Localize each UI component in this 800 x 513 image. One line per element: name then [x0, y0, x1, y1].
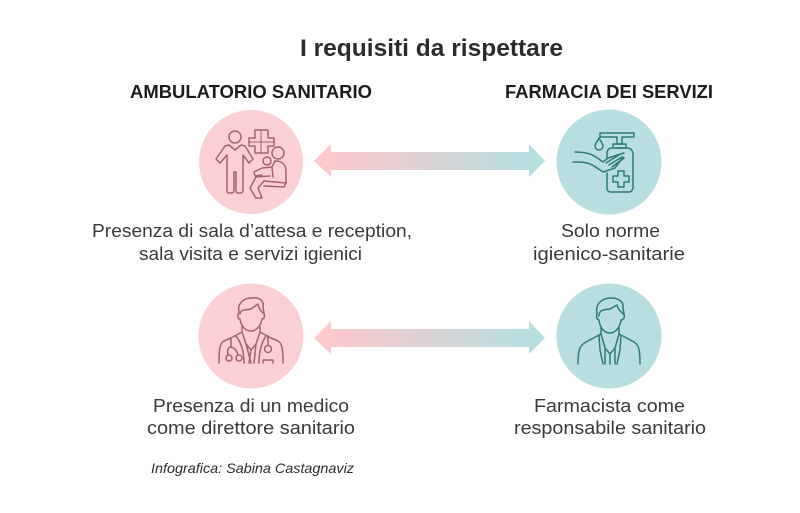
text: hygiene rules: Solo norme — [561, 220, 660, 241]
icon: doctor — [198, 284, 304, 388]
text: hygiene rules: igienico-sanitarie — [533, 243, 685, 264]
text: medical director — [147, 395, 355, 438]
heading: ambulatorio sanitario: AMBULATORIO SANITARIO — [130, 82, 372, 102]
arrow: top double arrow — [314, 144, 545, 177]
text: pharmacist: Farmacista come — [534, 395, 685, 416]
credit: Infografica: Sabina Castagnaviz — [151, 460, 354, 476]
arrow: bottom double arrow — [314, 321, 545, 354]
text: medical director: Presenza di un medico — [153, 395, 349, 416]
text: ambulatory rooms — [92, 220, 412, 264]
icon: waiting room — [199, 110, 303, 214]
text: ambulatory rooms: Presenza di sala d’attesa e reception, — [92, 220, 412, 241]
title: I requisiti da rispettare — [300, 35, 563, 62]
text: hygiene rules — [533, 220, 685, 264]
text: medical director: come direttore sanitario — [147, 417, 355, 438]
text: ambulatory rooms: sala visita e servizi igienici — [139, 243, 362, 264]
icon: hand sanitizer — [556, 110, 662, 214]
heading: farmacia dei servizi: FARMACIA DEI SERVIZI — [505, 82, 713, 102]
text: pharmacist — [514, 395, 706, 438]
icon: pharmacist — [556, 284, 662, 388]
text: pharmacist: responsabile sanitario — [514, 417, 706, 438]
